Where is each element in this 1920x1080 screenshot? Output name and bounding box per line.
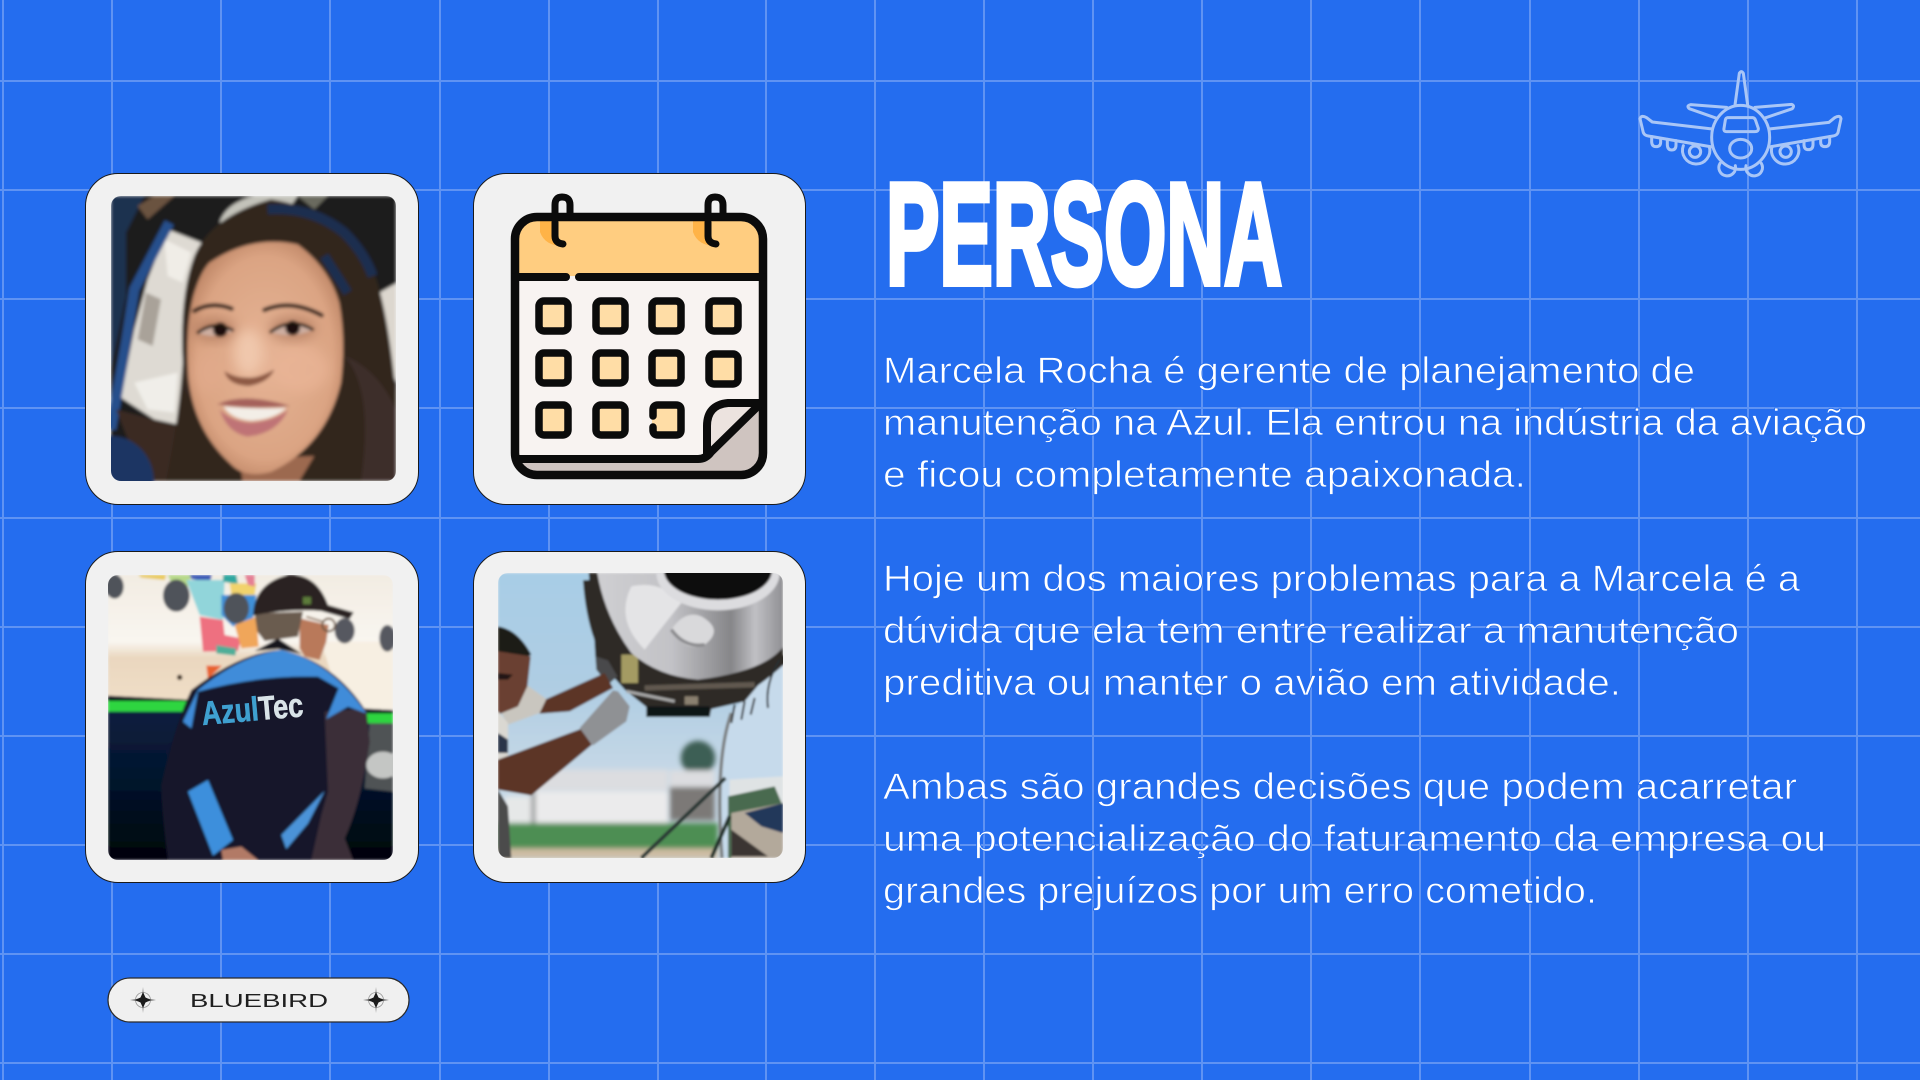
paragraph 1: Marcela Rocha é gerente de planejamento de — [883, 350, 1695, 391]
paragraph 2 — [883, 558, 1800, 703]
paragraph 1: manutenção na Azul. Ela entrou na indústria da aviação — [883, 402, 1867, 443]
icon: left sparkle — [130, 987, 156, 1013]
paragraph 2: dúvida que ela tem entre realizar a manutenção — [883, 610, 1739, 651]
panel: photo of Marcela Rocha — [85, 172, 419, 504]
paragraph 3: grandes prejuízos por um erro cometido. — [883, 870, 1597, 911]
paragraph 3 — [883, 766, 1826, 911]
panel: calendar icon card — [473, 172, 806, 504]
panel: engine maintenance photo — [473, 551, 806, 883]
panel: AzulTec technician photo — [85, 551, 419, 883]
photo: mechanic servicing jet engine — [498, 573, 783, 858]
badge: BLUEBIRD — [107, 977, 410, 1023]
photo: technician in AzulTec jacket beside aircraft — [108, 575, 393, 860]
icon: calendar — [510, 194, 768, 480]
paragraph 3: uma potencialização do faturamento da empresa ou — [883, 818, 1826, 859]
paragraph 2: preditiva ou manter o avião em atividade. — [883, 662, 1621, 703]
photo: technician in AzulTec jacket beside aircraft: AzulTec — [200, 687, 304, 732]
paragraph 1 — [883, 350, 1867, 495]
badge text: BLUEBIRD — [190, 990, 328, 1011]
paragraph 2: Hoje um dos maiores problemas para a Marcela é a — [883, 558, 1800, 599]
photo: smiling woman portrait — [111, 196, 396, 481]
paragraph 1: e ficou completamente apaixonada. — [883, 454, 1526, 495]
paragraph 3: Ambas são grandes decisões que podem acarretar — [883, 766, 1797, 807]
text block: persona description — [883, 350, 1867, 911]
icon: right sparkle — [363, 987, 389, 1013]
icon: airplane outline — [1638, 70, 1842, 178]
